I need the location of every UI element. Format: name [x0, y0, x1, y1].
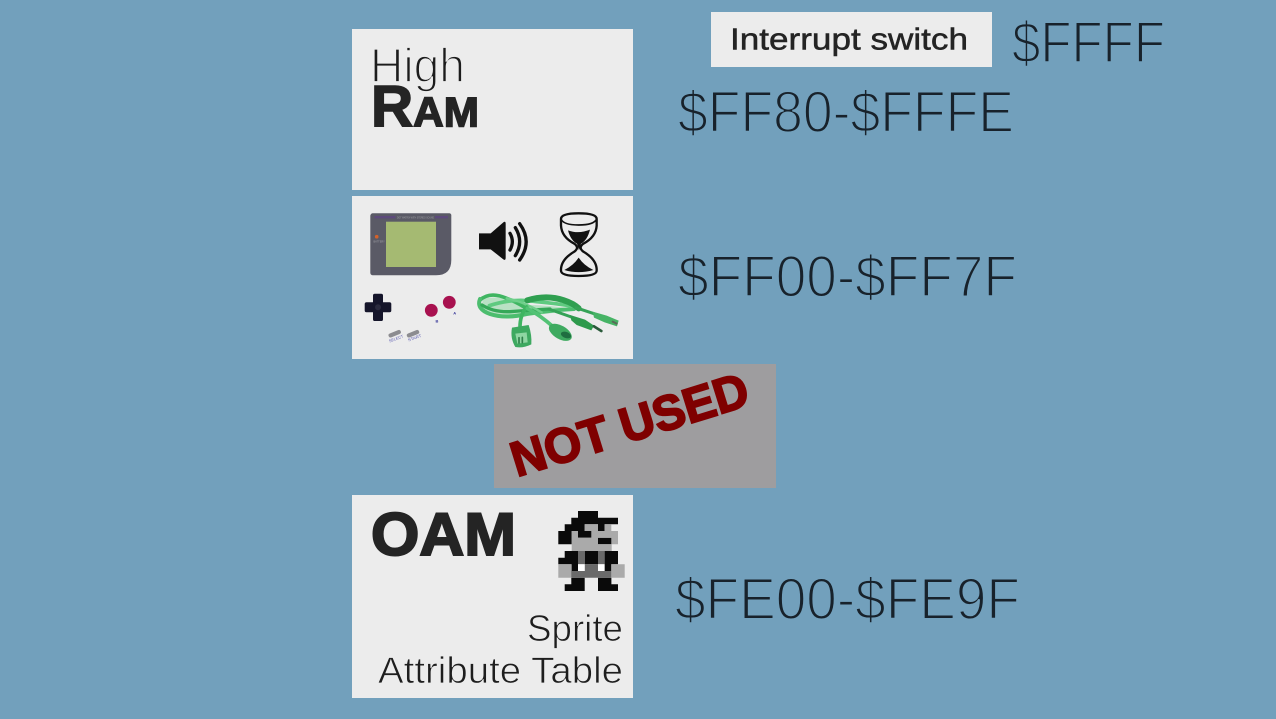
heading: OAM: OAM [371, 501, 516, 568]
stamp: NOT USED: NOT USED [504, 363, 755, 488]
panel: OAM [352, 495, 633, 698]
text: Sprite Attribute Table: Attribute Table [378, 650, 623, 691]
address: FFFF: $FFFF [1012, 10, 1165, 76]
connector: fourth plug [593, 312, 619, 326]
icon: hourglass [561, 213, 597, 276]
panel: interrupt switch: Interrupt switch [730, 21, 968, 56]
panel: high RAM [352, 29, 633, 190]
icon: A and B buttons: B [436, 318, 438, 324]
icon: speaker [479, 222, 526, 260]
icon: d-pad [365, 294, 391, 321]
icon: game boy screen [370, 213, 451, 275]
text: Sprite Attribute Table: Sprite [527, 608, 623, 649]
icon: select and start buttons: START [407, 333, 423, 342]
icon: A and B buttons [425, 296, 456, 324]
icon: select and start buttons [388, 329, 423, 343]
address: FF00-FF7F: $FF00-$FF7F [678, 244, 1017, 310]
icon: A and B buttons: A [453, 310, 456, 316]
icon: sprite [558, 511, 625, 591]
icon: select and start buttons: SELECT [388, 333, 404, 343]
icon: game boy screen: BATTERY [374, 240, 385, 244]
text: Sprite Attribute Table [378, 608, 623, 691]
icon: green link cable [479, 295, 619, 347]
panel: IO registers [352, 196, 633, 359]
connector: small plug [546, 320, 575, 344]
address: FF80-FFFE: $FF80-$FFFE [678, 80, 1014, 145]
panel: interrupt switch [711, 12, 992, 67]
heading: High: High [370, 40, 465, 93]
heading: RAM: RAM [371, 74, 479, 140]
address: FE00-FE9F: $FE00-$FE9F [675, 567, 1020, 632]
icon: game boy screen: DOT MATRIX WITH STEREO SOUND [397, 215, 435, 219]
connector: large plug [511, 325, 531, 347]
connector: third plug [570, 315, 601, 331]
panel: not used [494, 363, 776, 488]
